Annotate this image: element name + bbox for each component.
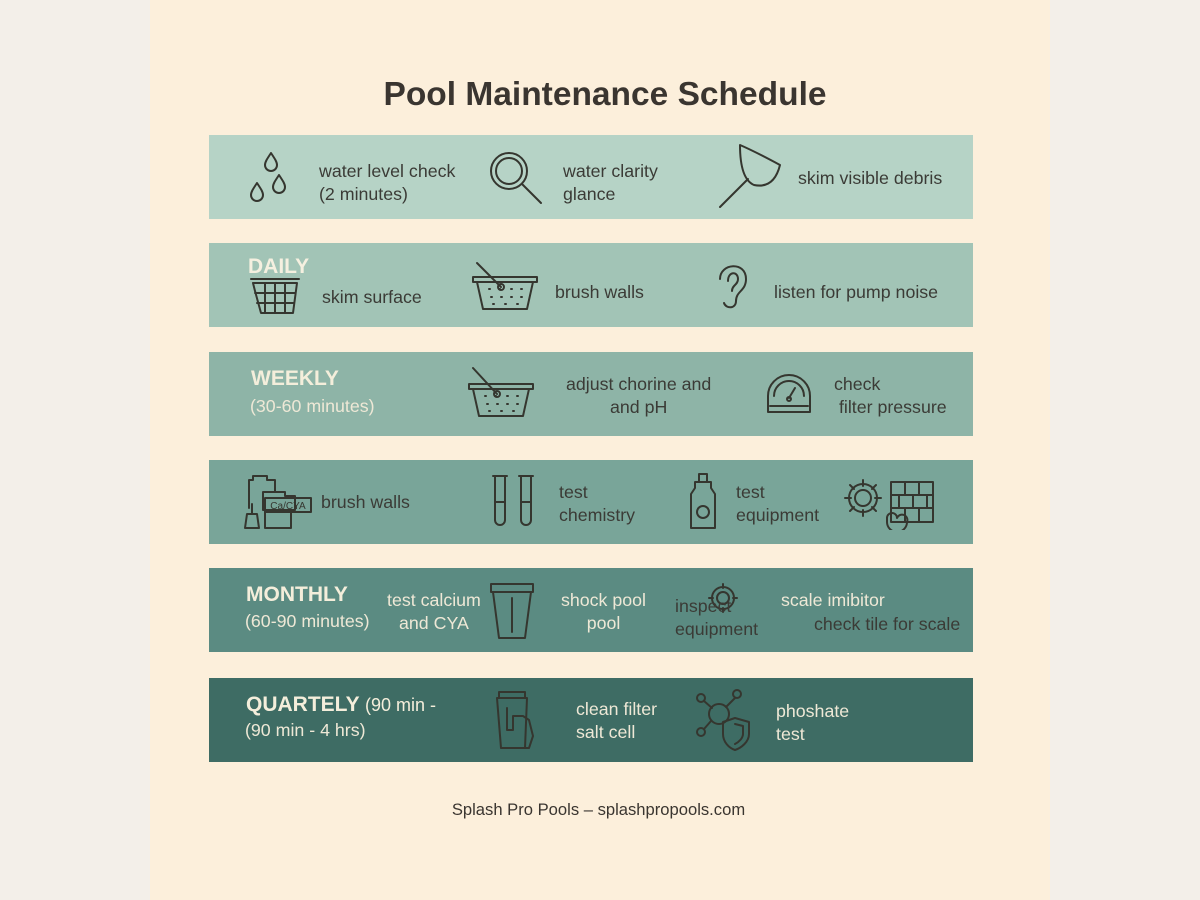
icon: molecule shield xyxy=(696,689,750,751)
panel: monthly xyxy=(209,568,973,652)
text: listen for pump noise: listen for pump noise xyxy=(774,282,938,302)
panel: daily xyxy=(209,243,973,327)
text: check filter pressure: filter pressure xyxy=(839,397,947,417)
icon: basket xyxy=(468,367,534,417)
text: weekly duration: (30-60 minutes) xyxy=(250,396,375,416)
text: water clarity xyxy=(563,161,658,204)
text: test chemistry xyxy=(559,482,635,525)
panel: quarterly xyxy=(209,678,973,762)
text: monthly duration: (60-90 minutes) xyxy=(245,611,370,631)
text: test equipment: equipment xyxy=(736,505,819,525)
text: shock pool xyxy=(561,590,646,633)
title: Pool Maintenance Schedule xyxy=(383,76,827,113)
icon: net xyxy=(250,278,300,314)
label: monthly: MONTHLY xyxy=(246,583,348,606)
text: water level check: (2 minutes) xyxy=(319,184,408,204)
icon: Ca/CYA equipment: Ca/CYA xyxy=(270,501,306,512)
panel: band 4 xyxy=(209,460,973,544)
text: water clarity: glance xyxy=(563,184,615,204)
icon: cup xyxy=(490,583,534,639)
label: weekly: WEEKLY xyxy=(251,367,339,390)
text: brush walls: brush walls xyxy=(555,282,644,302)
text: quarterly duration: (90 min - 4 hrs) xyxy=(245,720,366,740)
text: test calcium xyxy=(387,590,481,633)
icon: filter cartridge xyxy=(496,691,534,749)
text: test calcium: and CYA xyxy=(399,613,469,633)
footer: Splash Pro Pools – splashpropools.com xyxy=(452,800,745,819)
icon: skimmer xyxy=(719,144,781,208)
text: test calcium: test calcium xyxy=(387,590,481,610)
text: scale inhibitor: scale imibitor xyxy=(781,590,885,610)
icon: bottle xyxy=(690,473,716,529)
text: clean filter: clean filter xyxy=(576,699,657,719)
text: inspect equipment: inspect xyxy=(675,596,731,616)
icon: water drops xyxy=(250,152,286,202)
text: water clarity: water clarity xyxy=(563,161,658,181)
icon: magnifier xyxy=(490,152,542,204)
text: phosphate test: test xyxy=(776,724,805,744)
text: test equipment: test xyxy=(736,482,765,502)
text: water level check: water level check xyxy=(319,161,455,181)
text: test chemistry: test xyxy=(559,482,588,502)
label: quarterly: QUARTELY (90 min - xyxy=(246,693,436,716)
text: skim surface: skim surface xyxy=(322,287,422,307)
icon: ear xyxy=(719,265,747,308)
text: brush walls: brush walls xyxy=(321,492,410,512)
text: phosphate test xyxy=(776,701,849,744)
icon: Ca/CYA equipment xyxy=(244,475,312,529)
icon: basket xyxy=(472,262,538,310)
text: check filter pressure xyxy=(834,374,947,417)
icon: gear and tiles xyxy=(844,479,934,530)
text: shock pool: shock pool xyxy=(561,590,646,610)
panel: weekly xyxy=(209,352,973,436)
icon: gauge xyxy=(767,374,811,413)
text: adjust chlorine xyxy=(566,374,711,417)
text: clean filter: salt cell xyxy=(576,722,635,742)
text: check filter pressure: check xyxy=(834,374,880,394)
text: test equipment xyxy=(736,482,819,525)
text: check tile: check tile for scale xyxy=(814,614,960,634)
text: test chemistry: chemistry xyxy=(559,505,635,525)
text: adjust chlorine: and pH xyxy=(610,397,667,417)
text: shock pool: pool xyxy=(587,613,620,633)
label: daily: DAILY xyxy=(248,255,309,278)
text: inspect equipment xyxy=(675,596,758,639)
text: phosphate test: phoshate xyxy=(776,701,849,721)
text: adjust chlorine: adjust chorine and xyxy=(566,374,711,394)
icon: gear small xyxy=(708,583,738,613)
panel: band 1 xyxy=(209,135,973,219)
icon: test tubes xyxy=(492,475,534,526)
text: clean filter xyxy=(576,699,657,742)
text: inspect equipment: equipment xyxy=(675,619,758,639)
text: water level check xyxy=(319,161,456,204)
text: skim visible debris: skim visible debris xyxy=(798,168,942,188)
